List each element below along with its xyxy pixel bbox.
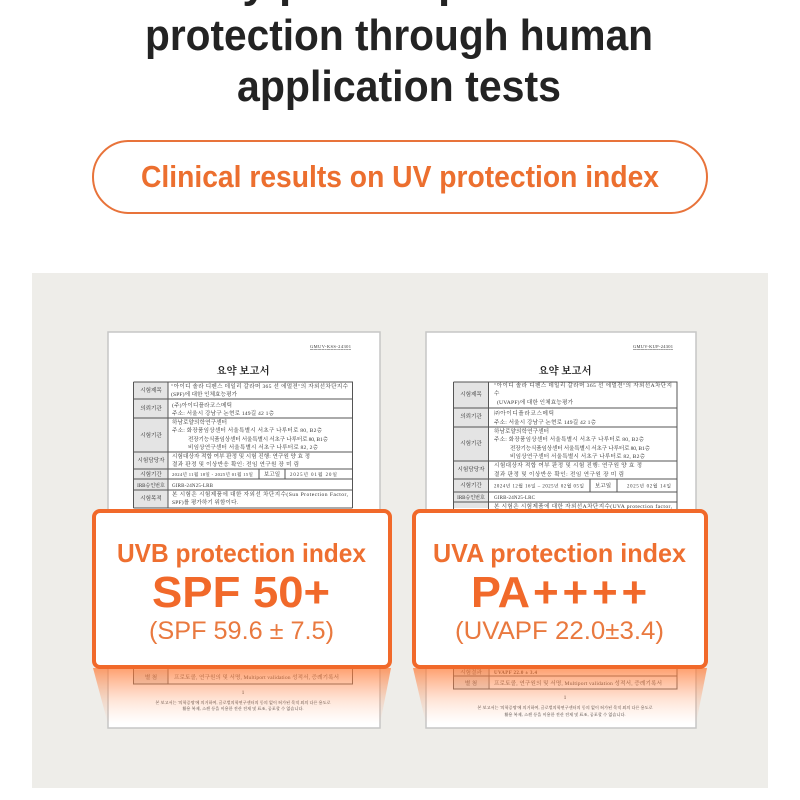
document: UVA summary report: 별 첨 xyxy=(465,679,477,687)
document: UVA summary report: 수 xyxy=(494,390,500,397)
title: application tests xyxy=(237,62,561,111)
document: UVB summary report: 시험담당자 xyxy=(137,456,165,464)
document: UVB summary report: SPF)를 평가하기 위함이다. xyxy=(172,498,239,506)
document: UVB summary report: 본 보고서는 '의학증명'에 의거하여, 글로벌의학연구센터의 동의 없이 허가된 목적 외의 다른 용도로 xyxy=(156,699,331,706)
glow under UVB card xyxy=(93,668,391,724)
document: UVA summary report: 결과 판정 및 이상반응 확인: 전임 연구원 장 미 림 xyxy=(494,470,624,478)
document: UVA summary report: 주소: 화장품임상센터 서울특별시 서초구 나루터로 80, B2층 xyxy=(494,435,645,443)
document: UVB summary report: 시험기간 xyxy=(140,470,162,478)
document: UVA summary report: GMUV-KUP-24301 xyxy=(633,344,673,349)
document: UVA summary report: IRB승인번호 xyxy=(457,494,485,501)
document: UVA summary report: 시험제목 xyxy=(460,390,482,398)
document: UVB summary report: 2025년 01월 20일 xyxy=(290,471,337,478)
document: UVA summary report: 본 시험은 시험제품에 대한 자외선A차단지수(UVA protection factor, xyxy=(494,502,673,510)
title xyxy=(145,0,653,111)
document: UVA summary report: 활용 복제, 스캔 등을 이용한 전산 전재 및 표조, 공포할 수 없습니다. xyxy=(504,711,626,718)
document: UVB summary report: 시험대상자 적합 여부 판정 및 시험 진행: 연구원 양 효 정 xyxy=(172,452,310,460)
document: UVB summary report: 주소: 서울시 강남구 논현로 149길 42 1층 xyxy=(172,409,275,417)
document: UVB summary report: 시험제목 xyxy=(140,386,162,394)
glow under UVA card xyxy=(413,668,707,724)
document: UVA summary report: 시험결과 xyxy=(460,668,482,676)
document: UVA summary report: 요약 보고서 xyxy=(538,364,592,377)
document: UVA summary report: 비임상연구센터 서울특별시 서초구 나루터로 82, B2층 xyxy=(510,452,646,460)
card: UVA protection index: UVA protection index xyxy=(433,538,687,568)
card: UVB protection index xyxy=(94,511,390,667)
document: UVB summary report: 결과 판정 및 이상반응 확인: 전임 연구원 장 미 림 xyxy=(172,460,299,468)
document: UVA summary report: 하남로얄의학연구센터 xyxy=(494,427,549,435)
document: UVA summary report: 시험대상자 적합 여부 판정 및 시험 진행: 연구원 양 효 정 xyxy=(494,461,642,469)
document: UVA summary report: 2025년 02월 14일 xyxy=(627,482,671,490)
document: UVA summary report: 전장기능식품임상센터 서울특별시 서초구 나루터로 80, B1층 xyxy=(510,444,651,452)
card: UVB protection index: SPF 50+ xyxy=(152,568,330,617)
card: UVB protection index: (SPF 59.6 ± 7.5) xyxy=(149,617,334,645)
card: UVB protection index: UVB protection index xyxy=(117,538,367,568)
card: UVA protection index: (UVAPF 22.0±3.4) xyxy=(455,617,664,645)
document: UVB summary report: 의뢰기관 xyxy=(140,404,162,412)
document: UVA summary report: 보고일 xyxy=(595,482,611,490)
document: UVA summary report: (UVAPF)에 대한 인체효능평가 xyxy=(497,398,574,406)
document: UVB summary report: 요약 보고서 xyxy=(216,364,270,377)
document: UVB summary report: GMUV-KSS-24301 xyxy=(310,344,351,349)
document: UVA summary report: ㈜아이디플라코스메틱 xyxy=(494,409,554,417)
pill heading: clinical results: Clinical results on UV protection index xyxy=(141,159,660,194)
document: UVB summary report: 프로토콜, 연구원의 및 서명, Multiport validation 성적서, 증례기록서 xyxy=(174,673,339,681)
document: UVA summary report: GIRB-24N25-LRC xyxy=(494,496,536,501)
document: UVB summary report: IRB승인번호 xyxy=(137,482,165,489)
document: UVA summary report: 시험기관 xyxy=(460,439,482,447)
document: UVB summary report: 시험기관 xyxy=(140,431,162,439)
document: UVB summary report: 주소: 화장품임상센터 서울특별시 서초구 나루터로 80, B2층 xyxy=(172,426,323,434)
document: UVB summary report: 1 xyxy=(242,691,245,696)
document: UVB summary report: 하남로얄의학연구센터 xyxy=(172,418,227,426)
document: UVB summary report: 시험목적 xyxy=(140,494,162,502)
document: UVB summary report: (SPF)에 대한 인체효능평가 xyxy=(171,390,238,398)
document: UVB summary report: (주)아이디플라코스메틱 xyxy=(172,401,232,409)
document: UVB summary report: 활용 복제, 스캔 등을 이용한 전산 전재 및 표조, 공포할 수 없습니다. xyxy=(182,705,304,712)
title: protection through human xyxy=(145,11,653,60)
card: UVA protection index xyxy=(414,511,706,667)
document: UVB summary report xyxy=(108,332,380,728)
document: UVA summary report: 시험담당자 xyxy=(457,465,485,473)
document: UVA summary report: 프로토콜, 연구원의 및 서명, Multiport validation 성적서, 증례기록서 xyxy=(494,679,662,687)
document: UVA summary report: 1 xyxy=(564,696,567,701)
panel: test reports xyxy=(32,273,768,788)
document: UVB summary report: "아이디 솔라 디펜스 데일리 갈라머 365 선 에멀젼"의 자외선차단지수 xyxy=(171,382,349,390)
document: UVB summary report: 별 첨 xyxy=(145,673,157,681)
document: UVA summary report: 본 보고서는 '의학증명'에 의거하여, 글로벌의학연구센터의 동의 없이 허가된 목적 외의 다른 용도로 xyxy=(478,704,653,711)
document: UVA summary report xyxy=(426,332,696,728)
document: UVB summary report: 전장기능식품임상센터 서울특별시 서초구 나루터로 80, B1층 xyxy=(188,435,329,443)
document: UVB summary report: 본 시험은 시험제품에 대한 자외선 차단지수(Sun Protection Factor, xyxy=(172,490,349,498)
document: UVB summary report: 비임상연구센터 서울특별시 서초구 나루터로 82, 2층 xyxy=(188,443,319,451)
document: UVB summary report: 보고일 xyxy=(264,470,280,478)
document: UVB summary report: GIRB-24N25-LRB xyxy=(172,484,214,489)
document: UVA summary report: UVAPF 22.0 ± 3.4 xyxy=(494,671,538,676)
document: UVB summary report: 2024년 11월 18일 - 2025년 01월 15일 xyxy=(172,471,253,478)
card: UVA protection index: PA xyxy=(471,568,530,617)
document: UVA summary report: 시험기간 xyxy=(460,481,482,489)
document: UVA summary report: "아이디 솔라 디펜스 데일리 갈라머 365 선 에멀젼"의 자외선A차단지 xyxy=(494,381,672,389)
pill heading: clinical results xyxy=(93,141,707,213)
card: UVA protection index: ++++ xyxy=(533,568,651,617)
document: UVA summary report: 2024년 12월 16일 – 2025년 02월 05일 xyxy=(494,482,584,490)
document: UVA summary report: 의뢰기관 xyxy=(460,412,482,420)
document: UVA summary report: 주소: 서울시 강남구 논현로 149길 42 1층 xyxy=(494,418,597,426)
